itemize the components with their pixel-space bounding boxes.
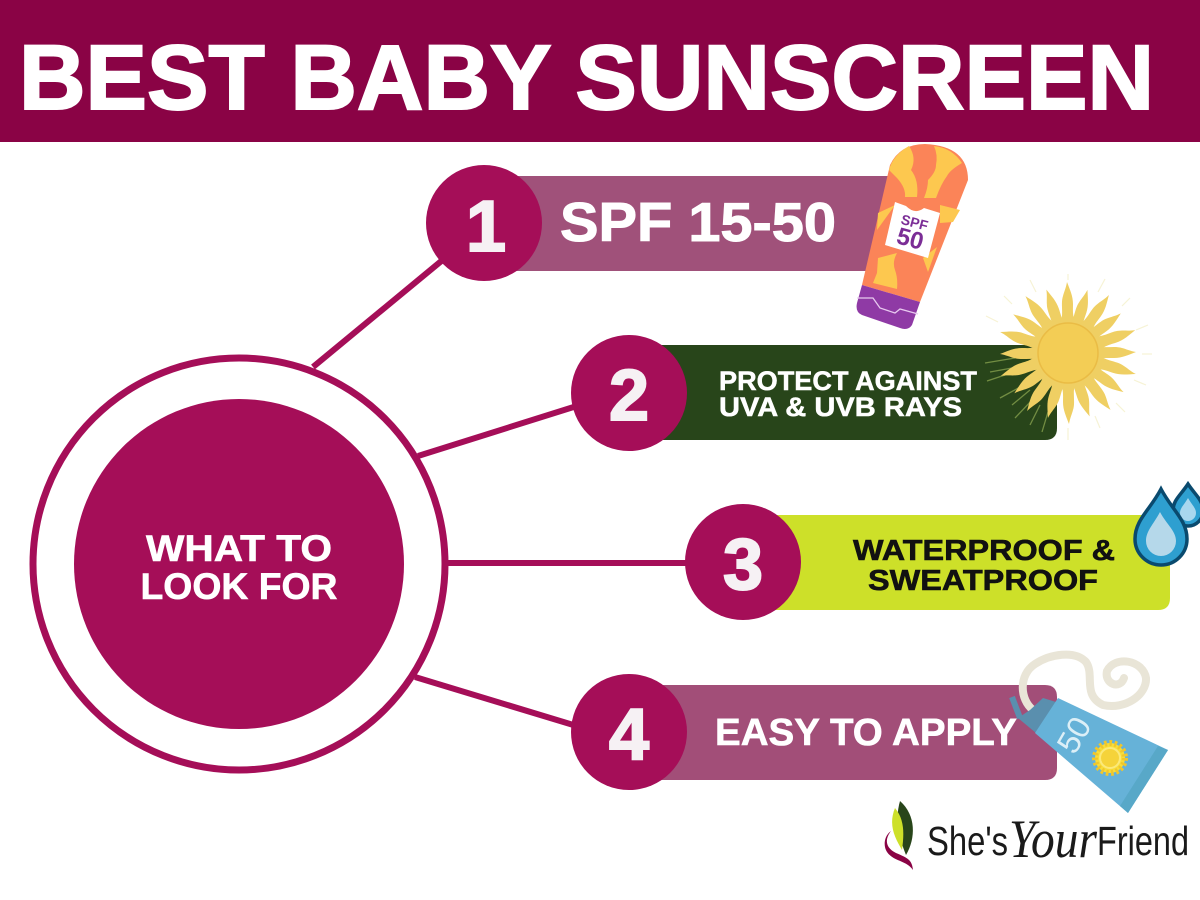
item 3 label: WATERPROOF & — [853, 535, 1115, 567]
item 1 label: SPF 15-50 — [560, 191, 836, 253]
icon: SPF 50 sunscreen bottle — [857, 144, 968, 329]
item 2 label — [719, 366, 977, 422]
item 4: easy to apply — [571, 674, 1057, 790]
item 3 label — [853, 535, 1115, 597]
logo: She's Your Friend: Your — [1009, 809, 1098, 869]
item 2: protect against UVA and UVB rays — [571, 335, 1057, 451]
item 2 label: UVA & UVB RAYS — [719, 392, 962, 422]
bottle label text: SPF — [899, 211, 930, 234]
number 1: 1 — [466, 187, 506, 267]
number 3: 3 — [723, 525, 763, 605]
bottle label text: 50 — [894, 223, 926, 256]
header banner — [0, 0, 1200, 142]
item 1: SPF 15-50 — [426, 165, 900, 281]
item 3 label: SWEATPROOF — [868, 565, 1098, 597]
connector lines — [313, 258, 695, 727]
icon: sun — [985, 274, 1152, 440]
number 2: 2 — [609, 356, 649, 436]
item 4 label: EASY TO APPLY — [715, 712, 1017, 754]
hub label — [140, 528, 338, 607]
icon: water drops — [1135, 484, 1200, 565]
bottle label text — [893, 211, 930, 256]
number 4: 4 — [609, 695, 649, 775]
tube sun emblem — [1095, 743, 1125, 773]
logo mark — [885, 801, 913, 870]
hub label: LOOK FOR — [140, 566, 338, 607]
icon: sunscreen tube with squiggle — [1012, 655, 1168, 813]
item 3: waterproof and sweatproof — [685, 504, 1170, 620]
title: BEST BABY SUNSCREEN — [19, 27, 1154, 129]
logo: She's Your Friend — [885, 801, 1189, 870]
item 2 label: PROTECT AGAINST — [719, 366, 977, 396]
tube 50 text: 50 — [1050, 711, 1098, 759]
central hub: what to look for — [33, 358, 445, 770]
logo wordmark: She's — [927, 818, 1008, 864]
hub label: WHAT TO — [146, 528, 332, 569]
